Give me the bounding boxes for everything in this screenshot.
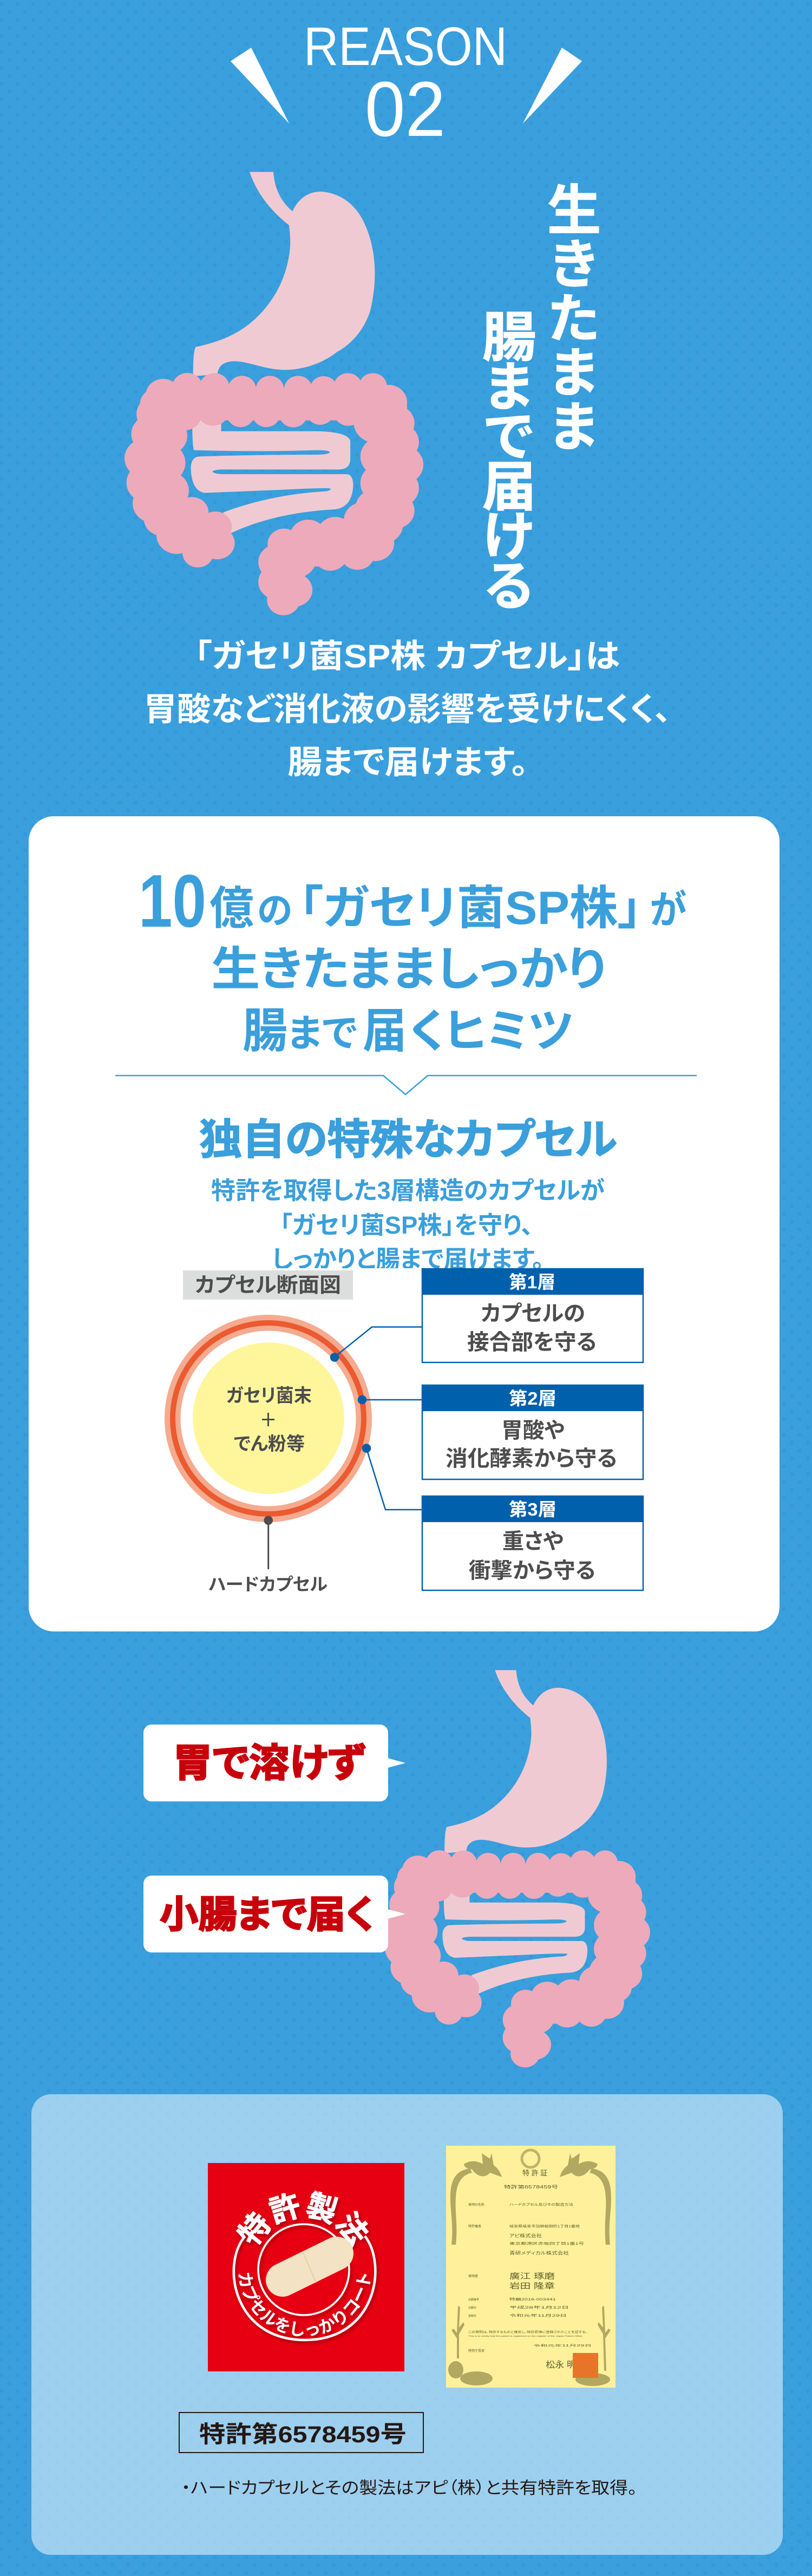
image: patent certificate: 岐阜県岐阜市加納桜田町1丁目1番地 [509,2224,580,2228]
heading: main headline: 「ガセリ菌SP株」 [299,882,642,934]
heading: main headline: 億 [209,883,254,934]
callout: small intestine [143,1876,405,1952]
heading: main headline: 10 [139,860,206,943]
heading: main headline: 届 [363,1004,407,1058]
box: layer 2: 消化酵素から守る [446,1447,617,1471]
box: layer 2: 胃酸や [501,1419,565,1443]
text block: intro paragraph [143,638,671,781]
illustration: stomach and intestines [125,172,423,615]
heading: special capsule: 独自の特殊なカプセル [199,1116,617,1163]
text block: capsule description [211,1177,605,1273]
image: patent certificate: 出願番号 [468,2298,479,2302]
badge: patented manufacturing method: 特許製法 [236,2190,371,2251]
callout: small intestine: 小腸まで届く [160,1893,374,1936]
badge: patented manufacturing method [208,2163,404,2371]
image: patent certificate: 発明者 [468,2274,478,2278]
diagram: capsule cross-section: ガセリ菌末 [226,1386,312,1406]
box: layer 1: 接合部を守る [467,1330,597,1354]
box: layer 2 [422,1385,644,1479]
label: capsule cross-section title: カプセル断面図 [195,1274,341,1297]
label: patent number [179,2413,423,2453]
text block: capsule description: 「ガセリ菌SP株」を守り、 [280,1211,533,1239]
heading: main headline: が [650,889,686,932]
text block: patent note: ・ハードカプセルとその製法はアピ（株）と共有特許を取得。 [181,2479,637,2498]
heading: main headline [139,860,686,1058]
box: layer 1 [422,1268,644,1362]
image: patent certificate: 東京都港区赤坂四丁目1番1号 [509,2241,584,2246]
box: layer 3: 重さや [502,1530,564,1554]
box: layer 2: 第2層 [509,1388,556,1408]
panel: white capsule secret [29,816,780,1631]
image: patent certificate: 平成28年1月12日 [509,2305,569,2310]
callout lines and dots [264,1327,422,1569]
image: patent certificate: 特許権者 [468,2224,481,2228]
label: patent number: 特許第6578459号 [199,2422,407,2448]
heading: REASON 02 [304,16,507,153]
heading: vertical catch copy: 生きたまま [539,182,599,453]
image: patent certificate: 廣江 琢磨 [509,2272,555,2280]
callout: stomach [143,1725,405,1801]
box: layer 3: 第3層 [509,1499,556,1519]
text block: capsule description: 特許を取得した3層構造のカプセルが [211,1177,605,1204]
image: patent certificate: 特許第6578459号 [504,2184,558,2190]
label: hard capsule: ハードカプセル [208,1575,328,1594]
heading: REASON 02: REASON [304,16,507,77]
badge: patented manufacturing method: カプセルをしっかりコート [236,2272,373,2341]
image: patent certificate: 令和元年11月29日 [509,2313,567,2318]
box: layer 3: 衝撃から守る [469,1559,595,1583]
image: patent certificate: 特許庁長官 [468,2349,484,2353]
text block: intro paragraph: 胃酸など消化液の影響を受けにくく、 [143,691,671,727]
heading: main headline: 生きたまましっかり [211,943,606,995]
image: patent certificate: 令和元年11月29日 [533,2344,592,2348]
callout: stomach: 胃で溶けず [173,1742,365,1785]
box: layer 1: 第1層 [509,1272,555,1292]
heading: main headline: の [257,890,292,932]
heading: vertical catch copy: 腸まで届ける [474,309,535,608]
panel: patent [31,2094,783,2555]
heading: main headline: くヒミツ [409,1006,574,1057]
image: patent certificate: 発明の名称 [468,2203,484,2207]
text block: capsule description: しっかりと腸まで届けます。 [272,1246,544,1273]
diagram: capsule cross-section: でん粉等 [234,1434,305,1454]
diagram: capsule cross-section [165,1315,372,1522]
image: patent certificate [446,2146,615,2388]
heading: vertical catch copy [474,182,599,608]
image: patent certificate: 松永 明 [546,2360,576,2370]
image: patent certificate: アピ株式会社 [509,2233,542,2238]
image: patent certificate: 特願2016-003441 [509,2297,556,2302]
image: patent certificate: This is to certify that the patent is registered on the register of the Japan Patent Office. [468,2335,583,2337]
label: capsule cross-section title [183,1270,353,1300]
image: patent certificate: この発明は、特許するものと確定し、特許原簿に登録されたことを証する。 [468,2330,587,2334]
text block: intro paragraph: 腸まで届けます。 [287,744,528,781]
image: patent certificate: ハードカプセル及びその製造方法 [509,2203,573,2207]
illustration: stomach and intestines, second copy [383,1670,650,2067]
image: patent certificate: 青研メディカル株式会社 [509,2250,569,2256]
heading: REASON 02: 02 [365,65,446,153]
heading: main headline: 腸 [243,1004,287,1058]
image: patent certificate: 登録日 [468,2314,476,2318]
image: patent certificate: 出願日 [468,2306,476,2310]
icon: right spike [523,48,582,123]
box: layer 3 [422,1496,644,1590]
box: layer 1: カプセルの [481,1302,585,1326]
icon: left spike [231,48,289,123]
text block: intro paragraph: 「ガセリ菌SP株 カプセル」は [194,638,620,674]
image: patent certificate: 岩田 隆章 [509,2282,555,2290]
heading: main headline: まで [287,1012,357,1054]
image: patent certificate: 特 許 証 [522,2169,547,2177]
